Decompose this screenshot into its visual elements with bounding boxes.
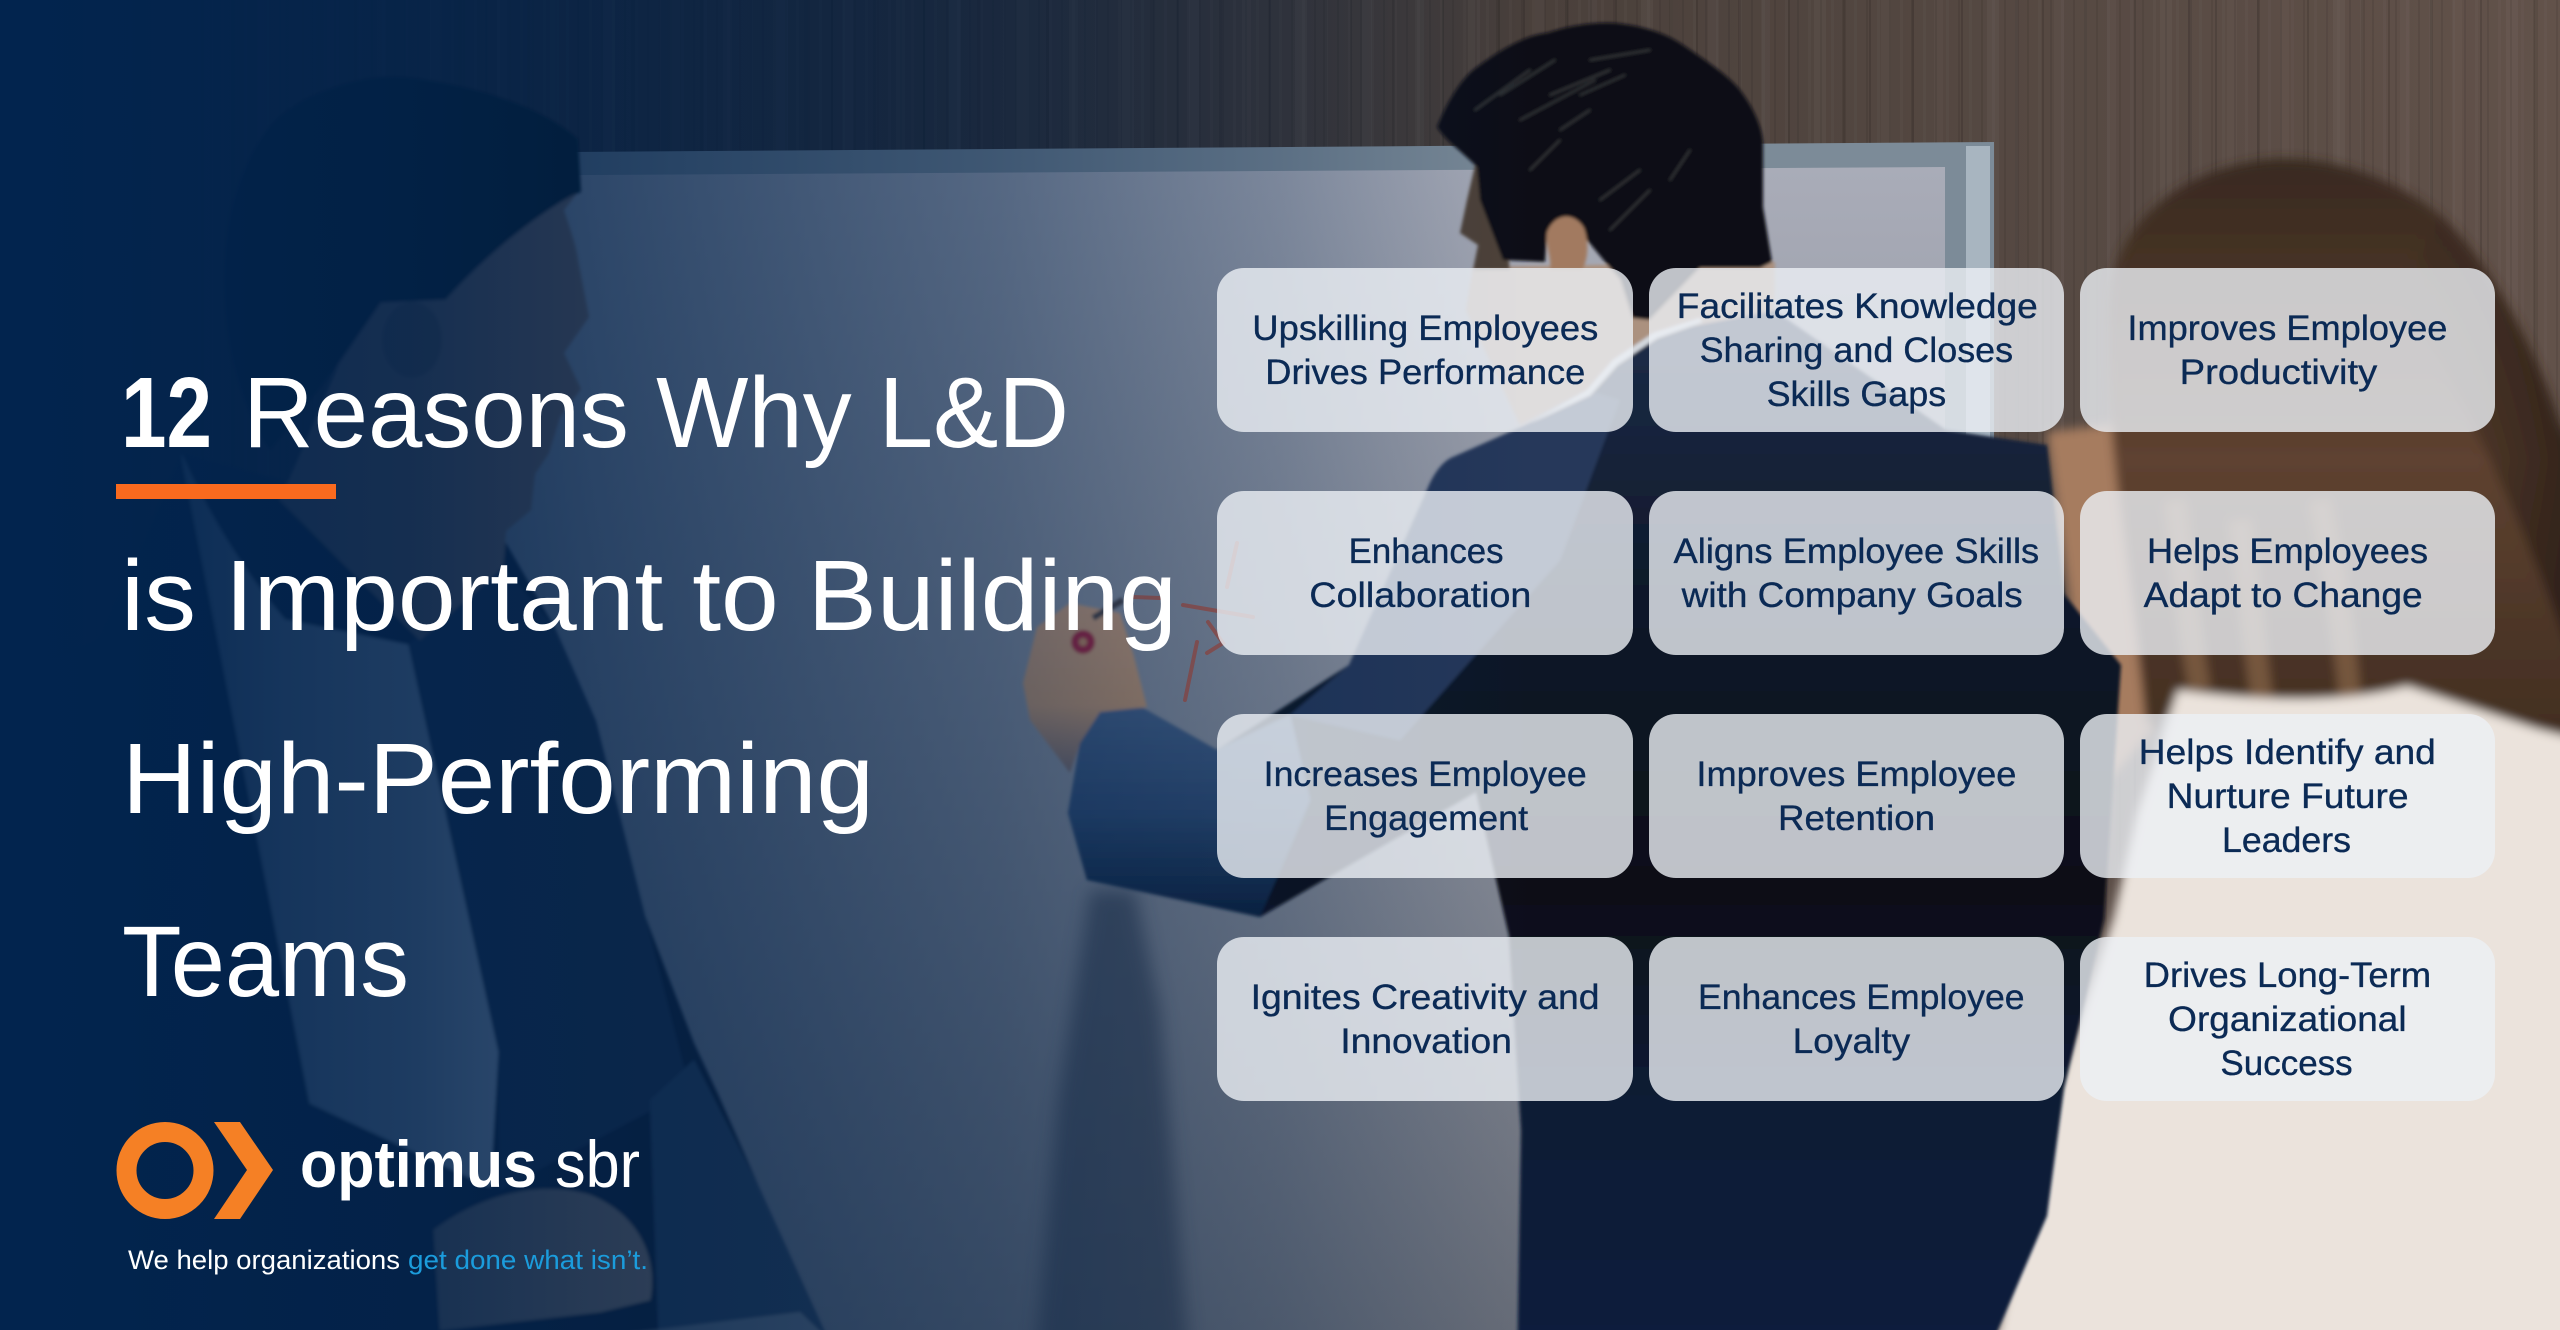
neck and skin	[1466, 262, 1775, 425]
card: adapt to change	[2080, 491, 2495, 655]
panel: reason cards grid	[1217, 268, 2495, 1101]
card: creativity	[1217, 937, 1633, 1101]
card: future leaders: Nurture Future	[2167, 777, 2409, 816]
logo: optimus sbr: sbr	[555, 1127, 640, 1201]
card: engagement: Increases Employee	[1264, 755, 1587, 794]
title: Teams	[122, 906, 409, 1018]
logo: optimus sbr	[126, 1122, 640, 1219]
card: knowledge sharing	[1649, 268, 2064, 432]
card: loyalty	[1649, 937, 2064, 1101]
tagline: We help organizations	[128, 1245, 400, 1275]
card: collaboration: Enhances	[1349, 532, 1504, 571]
card: retention: Retention	[1778, 799, 1935, 838]
tagline	[128, 1245, 648, 1275]
card: creativity: Innovation	[1340, 1022, 1512, 1061]
card: upskilling: Drives Performance	[1265, 353, 1585, 392]
card: knowledge sharing: Facilitates Knowledge	[1677, 287, 2038, 326]
card: retention: Improves Employee	[1696, 755, 2016, 794]
card: productivity: Improves Employee	[2127, 309, 2447, 348]
tagline: get done what isn’t.	[408, 1245, 648, 1275]
card: knowledge sharing: Sharing and Closes	[1700, 331, 2013, 370]
title: Reasons Why L&D	[243, 357, 1069, 469]
card: productivity	[2080, 268, 2495, 432]
card: engagement: Engagement	[1324, 799, 1528, 838]
man at whiteboard	[1023, 23, 2121, 1330]
title: High-Performing	[122, 723, 874, 835]
card: collaboration: Collaboration	[1309, 576, 1531, 615]
card: engagement	[1217, 714, 1633, 878]
title underline accent	[116, 484, 336, 499]
card: future leaders: Helps Identify and	[2139, 733, 2436, 772]
card: long-term success	[2080, 937, 2495, 1101]
card: long-term success: Organizational	[2168, 1000, 2407, 1039]
title	[121, 357, 1177, 1018]
card: knowledge sharing: Skills Gaps	[1767, 375, 1946, 414]
card: collaboration	[1217, 491, 1633, 655]
card: future leaders	[2080, 714, 2495, 878]
card: creativity: Ignites Creativity and	[1251, 978, 1600, 1017]
card: long-term success: Success	[2220, 1044, 2353, 1083]
card: aligns skills: Aligns Employee Skills	[1674, 532, 2039, 571]
logo: optimus sbr: optimus	[300, 1127, 537, 1201]
card: upskilling	[1217, 268, 1633, 432]
card: aligns skills: with Company Goals	[1681, 576, 2023, 615]
card: long-term success: Drives Long-Term	[2144, 956, 2431, 995]
card: retention	[1649, 714, 2064, 878]
card: adapt to change: Helps Employees	[2147, 532, 2428, 571]
title: is Important to Building	[121, 540, 1177, 652]
card: loyalty: Enhances Employee	[1698, 978, 2025, 1017]
card: loyalty: Loyalty	[1793, 1022, 1911, 1061]
title: 12	[121, 357, 212, 469]
card: adapt to change: Adapt to Change	[2144, 576, 2423, 615]
man on the left	[0, 77, 840, 1330]
card: upskilling: Upskilling Employees	[1252, 309, 1598, 348]
card: aligns skills	[1649, 491, 2064, 655]
woman	[1900, 159, 2560, 1330]
card: productivity: Productivity	[2180, 353, 2378, 392]
whiteboard	[430, 142, 1994, 1330]
card: future leaders: Leaders	[2222, 821, 2351, 860]
